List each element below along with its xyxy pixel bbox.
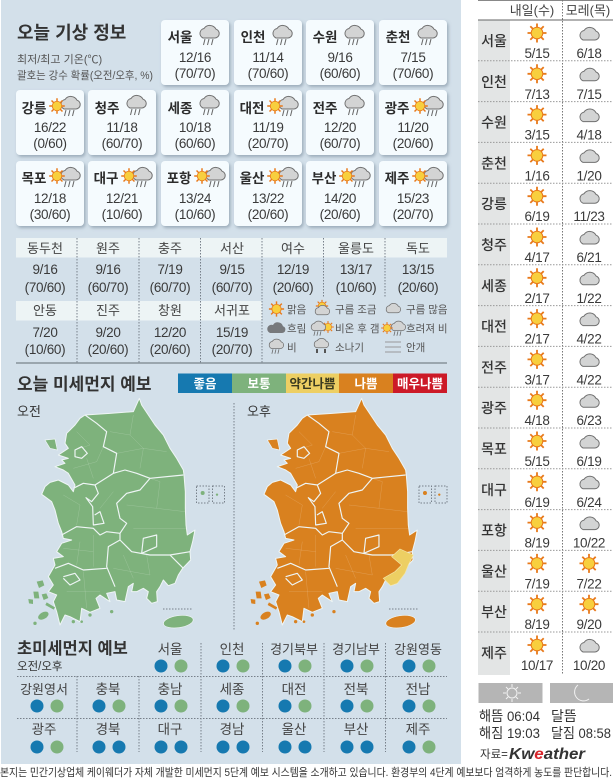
island inset boxes: afternoon [389, 486, 447, 609]
row: 청주: 6/21 [576, 250, 602, 265]
table cell: 서산 [212, 241, 252, 295]
weather card: 대구 [88, 161, 156, 226]
weather card: 청주: 청주 [95, 101, 119, 116]
dust item: 대전: 대전 [282, 682, 306, 697]
weather card: 대구: (10/60) [102, 207, 142, 222]
panel: today's weather and dust forecast [1, 0, 461, 764]
weather card: 부산 [306, 161, 374, 226]
table cell: 진주: 진주 [96, 303, 120, 318]
row: 청주 [481, 228, 602, 265]
table cell: 독도 [398, 241, 438, 295]
map: afternoon dust (orange) [251, 398, 440, 630]
column heading: tomorrow: 내일(수) [510, 3, 554, 18]
row: 포항 [481, 513, 605, 551]
row: 전주 [481, 350, 602, 387]
dust item: 전북 [340, 682, 374, 712]
source credit: Kweather: 자료= [480, 748, 508, 761]
weather card: 춘천 [379, 20, 447, 85]
row: 포항: 10/22 [573, 536, 605, 551]
weather card: 수원: 수원 [313, 30, 337, 45]
label: 오전: 오전 [17, 404, 41, 419]
row: 제주: 제주 [481, 645, 507, 661]
dust item: 세종 [216, 682, 250, 712]
weather card: 인천 [234, 20, 302, 85]
table cell: 울릉도 [336, 241, 376, 295]
weather card: 세종: 10/18 [179, 120, 211, 135]
legend item: 맑음: 맑음 [287, 304, 307, 316]
row: 강릉 [481, 187, 605, 224]
legend item: 소나기 [314, 338, 364, 354]
row: 대전: 4/22 [576, 332, 602, 347]
table cell: 동두천: 동두천 [27, 241, 63, 256]
row: 대구 [481, 472, 602, 510]
row: 강릉: 강릉 [481, 196, 507, 212]
weather card: 포항: 13/24 [179, 191, 212, 206]
row: 전주: 전주 [481, 359, 507, 375]
row: 인천: 인천 [481, 74, 507, 90]
weather card: 광주: (20/60) [393, 136, 433, 151]
row: 대구: 6/24 [576, 495, 602, 510]
island inset boxes: morning [163, 486, 224, 609]
row: 서울: 서울 [481, 33, 507, 49]
legend item: 흐려져 비: 흐려져 비 [406, 323, 448, 335]
row: 부산: 부산 [481, 604, 507, 620]
dust item: 광주 [30, 722, 64, 754]
table cell: 동두천: (70/60) [25, 280, 65, 295]
row: 서울 [481, 24, 602, 61]
row: 목포 [481, 432, 602, 469]
dust item: 대구: 대구 [158, 722, 182, 737]
dust item: 광주: 광주 [32, 722, 56, 737]
row: 포항: 8/19 [524, 536, 550, 551]
text block: sun and moon times: 해짐 19:03 [479, 725, 540, 741]
row: 울산: 7/19 [524, 576, 550, 591]
weather card: 부산: 부산 [312, 171, 337, 186]
dust item: 전남 [402, 682, 436, 712]
source credit: Kweather: Kweather [509, 746, 586, 763]
weather card: 광주 [379, 90, 447, 155]
row: 전주: 4/22 [576, 372, 602, 387]
weather card: 세종: 세종 [168, 101, 192, 116]
weather card: 서울: 12/16 [179, 50, 211, 65]
table cell: 독도: 독도 [406, 241, 430, 256]
table cell: 여수: (20/60) [273, 280, 313, 295]
table cell: 안동: 7/20 [32, 325, 58, 340]
weather card: 제주 [379, 161, 447, 226]
table cell: 창원: (20/60) [150, 342, 190, 357]
icon: sun box [478, 683, 542, 703]
row: 청주: 4/17 [524, 250, 550, 265]
grade: 매우나쁨: 매우나쁨 [397, 376, 443, 391]
row: 수원 [481, 105, 602, 143]
table cell: 창원: 창원 [158, 303, 182, 318]
row: 울산: 7/22 [576, 576, 602, 591]
row: 대전: 대전 [481, 319, 507, 335]
row: 세종: 세종 [481, 278, 507, 294]
table cell: 독도: 13/15 [402, 262, 434, 277]
weather card: 서울: 서울 [168, 30, 192, 45]
row: 세종: 2/17 [524, 291, 550, 306]
grade: 약간나쁨 [286, 374, 339, 393]
table cell: 원주 [88, 241, 128, 295]
weather card: 울산 [234, 161, 302, 226]
dust item: 경기남부: 경기남부 [332, 642, 380, 657]
weather card: 울산: 울산 [240, 171, 265, 186]
row: 부산 [481, 595, 602, 632]
dust item: 강원영동 [394, 642, 442, 672]
weather card: 청주 [88, 90, 156, 155]
dust item: 인천: 인천 [220, 642, 244, 657]
row: 강릉: 6/19 [524, 209, 550, 224]
grade: 매우나쁨 [393, 374, 447, 393]
table cell: 충주: 7/19 [157, 262, 183, 277]
dust item: 경남 [216, 722, 250, 754]
dust item: 경기북부 [270, 642, 318, 672]
weather card: 목포: (30/60) [30, 207, 70, 222]
weather card: 전주: 전주 [313, 101, 337, 116]
dust item: 울산: 울산 [282, 722, 306, 737]
weather card: 전주: 12/20 [324, 120, 356, 135]
weather card: 청주: 11/18 [106, 120, 138, 135]
row: 세종 [481, 268, 602, 306]
row: 부산: 9/20 [576, 617, 602, 632]
dust item: 세종: 세종 [220, 682, 244, 697]
dust item: 경북: 경북 [96, 722, 120, 737]
weather card: 광주: 11/20 [397, 120, 429, 135]
table cell: 창원 [150, 303, 190, 357]
row: 대전 [481, 309, 602, 347]
weather card: 울산: 13/22 [252, 191, 284, 206]
weather card: 서울 [161, 20, 229, 85]
dust item: 강원영서: 강원영서 [20, 682, 68, 697]
text block: unit notes: 괄호는 강수 확률(오전/오후, %) [17, 69, 153, 82]
row: 울산: 울산 [481, 563, 507, 579]
column heading: day after tomorrow: 모레(목) [566, 3, 610, 18]
dust item: 충북 [92, 682, 126, 712]
weather card: 목포 [16, 161, 84, 226]
table cell: 동두천 [25, 241, 65, 295]
dust item: 강원영동: 강원영동 [394, 642, 442, 657]
row: 대구: 대구 [481, 482, 507, 498]
row: 강릉: 11/23 [573, 209, 605, 224]
weather card: 인천: (70/60) [248, 66, 288, 81]
table cell: 서귀포: 서귀포 [214, 303, 250, 318]
weather card: 대전 [234, 90, 302, 155]
table cell: 충주: (60/70) [150, 280, 190, 295]
weather card: 제주: 15/23 [397, 191, 429, 206]
source credit: Kweather [480, 746, 586, 763]
table cell: 서산: (60/70) [212, 280, 252, 295]
row: 대구: 6/19 [524, 495, 550, 510]
weather card: 강릉 [16, 90, 84, 155]
weather card: 수원: 9/16 [327, 50, 353, 65]
text block: unit notes: 최저/최고 기온(℃) [17, 53, 102, 66]
title: today's weather: 오늘 기상 정보 [17, 23, 126, 43]
dust item: 충남: 충남 [158, 682, 182, 697]
table: other cities weather [16, 238, 447, 363]
row: 춘천: 1/20 [576, 168, 602, 183]
region: Ulsan and Busan moderately bad [383, 549, 413, 586]
legend item: 구름 많음 [386, 303, 448, 316]
weather card: 제주: (20/70) [393, 207, 433, 222]
row: 인천: 7/15 [576, 87, 602, 102]
weather card: 목포: 12/18 [34, 191, 66, 206]
table cell: 충주: 충주 [158, 241, 182, 256]
table cell: 여수: 여수 [281, 241, 305, 256]
legend item: 비온 후 갬 [311, 321, 379, 336]
text block: sun and moon times: 해뜸 06:04 [479, 708, 540, 724]
legend item: 비온 후 갬: 비온 후 갬 [335, 323, 379, 335]
weather card: 세종 [161, 90, 229, 155]
map: morning dust (green) [28, 398, 218, 630]
weather card: 수원: (60/60) [320, 66, 360, 81]
row: 수원: 3/15 [524, 128, 550, 143]
table cell: 서귀포: (20/70) [212, 342, 252, 357]
weather card: 울산: (20/60) [248, 207, 288, 222]
legend item: 흐림: 흐림 [287, 323, 306, 335]
text block: sun and moon times [479, 708, 611, 741]
heading: today's fine dust forecast: 오늘 미세먼지 예보 [17, 375, 152, 394]
dust item: 제주: 제주 [406, 722, 430, 737]
weather card: 부산: (20/60) [320, 207, 360, 222]
column labels background [478, 20, 510, 675]
table cell: 원주: (60/70) [88, 280, 128, 295]
legend: dust grades [178, 374, 447, 393]
row: 세종: 1/22 [576, 291, 602, 306]
weather card: 포항: (10/60) [175, 207, 215, 222]
dust item: 경기남부 [332, 642, 380, 672]
divider between morning and afternoon maps [233, 403, 235, 630]
table cell: 여수 [273, 241, 313, 295]
row: 수원: 4/18 [576, 128, 602, 143]
text block: sun and moon times: 달뜸 [551, 708, 577, 724]
weather card: 대전: 대전 [240, 101, 264, 116]
row: 수원: 수원 [481, 115, 507, 131]
table cell: 여수: 12/19 [277, 262, 309, 277]
table cell: 진주: (20/60) [88, 342, 128, 357]
weather card: 대구: 12/21 [106, 191, 138, 206]
table cell: 동두천: 9/16 [32, 262, 58, 277]
row: 제주: 10/17 [521, 658, 553, 673]
row: 인천: 7/13 [524, 87, 550, 102]
weather card: 광주: 광주 [385, 101, 409, 116]
row: 목포: 6/19 [576, 454, 602, 469]
weather card: 인천: 11/14 [252, 50, 284, 65]
row: 춘천: 1/16 [524, 168, 550, 183]
weather card: 세종: (60/60) [175, 136, 215, 151]
dust item: 경남: 경남 [220, 722, 244, 737]
legend item: 비 [269, 339, 297, 354]
dust item: 충북: 충북 [96, 682, 120, 697]
text block: unit notes [17, 53, 153, 82]
dust item: 부산: 부산 [344, 722, 368, 737]
weather card: 제주: 제주 [385, 171, 409, 186]
row: 제주: 10/20 [573, 658, 605, 673]
weather card: 춘천: 춘천 [386, 30, 410, 45]
dust item: 부산 [340, 722, 374, 754]
table cell: 울릉도: 13/17 [340, 262, 372, 277]
text block: sun and moon times: 달짐 08:58 [551, 725, 611, 741]
weather card: 포항: 포항 [167, 171, 192, 186]
table cell: 서귀포: 15/19 [216, 325, 248, 340]
legend item: 흐림 [267, 322, 306, 335]
legend item: 흐려져 비 [381, 321, 448, 336]
row: 광주: 4/18 [524, 413, 550, 428]
row: 춘천: 춘천 [481, 155, 507, 171]
table cell: 독도: (20/60) [398, 280, 438, 295]
table cell: 창원: 12/20 [154, 325, 186, 340]
row: 포항: 포항 [481, 523, 507, 539]
table cell: 울릉도: (10/60) [336, 280, 376, 295]
dust item: 전북: 전북 [344, 682, 368, 697]
legend item: 비: 비 [287, 342, 297, 354]
row: 인천 [481, 64, 602, 102]
weather card: 강릉: 강릉 [22, 101, 46, 116]
legend item: 구름 많음: 구름 많음 [406, 304, 448, 316]
row: 대전: 2/17 [524, 332, 550, 347]
table cell: 원주: 원주 [96, 241, 120, 256]
weather card: 포항 [161, 161, 229, 226]
icon: moon box [550, 683, 613, 703]
table cell: 안동 [25, 303, 65, 357]
weather card: 수원 [306, 20, 374, 85]
table cell: 충주 [150, 241, 190, 295]
dust item: 서울: 서울 [158, 642, 182, 657]
row: 울산 [481, 554, 602, 591]
legend item: 구름 조금: 구름 조금 [335, 304, 377, 316]
row: 부산: 8/19 [524, 617, 550, 632]
table cell: 진주: 9/20 [95, 325, 121, 340]
weather card: 대전: 11/19 [252, 120, 284, 135]
grade: 나쁨: 나쁨 [354, 377, 378, 391]
table cell: 울릉도: 울릉도 [338, 241, 374, 256]
heading: ultrafine dust forecast: 초미세먼지 예보 [17, 639, 128, 658]
grade: 나쁨 [339, 374, 393, 393]
row: 광주: 6/23 [576, 413, 602, 428]
row: 서울: 5/15 [524, 46, 550, 61]
table cell: 진주 [88, 303, 128, 357]
weather card: 강릉: 16/22 [34, 120, 66, 135]
weather card: 서울: (70/70) [175, 66, 215, 81]
legend item: 맑음 [269, 301, 307, 317]
legend: weather icons [267, 300, 448, 354]
table cell: 안동: (10/60) [25, 342, 65, 357]
dotted grid lines [17, 643, 447, 752]
dust item: 경기북부: 경기북부 [270, 642, 318, 657]
dust item: 대전 [278, 682, 312, 712]
weather card: 춘천: (70/60) [393, 66, 433, 81]
row: 광주: 광주 [481, 400, 507, 416]
dust item: 강원영서 [20, 682, 68, 712]
table cell: 서산: 9/15 [219, 262, 245, 277]
dust item: 충남 [154, 682, 188, 712]
row: 광주 [481, 391, 602, 428]
weather card: 춘천: 7/15 [400, 50, 426, 65]
table cell: 원주: 9/16 [95, 262, 121, 277]
weather card: 청주: (60/70) [102, 136, 142, 151]
weather card: 전주: (60/70) [320, 136, 360, 151]
table cell: 안동: 안동 [33, 303, 57, 318]
row: 목포: 목포 [481, 441, 507, 457]
weather card: 전주 [306, 90, 374, 155]
row: 목포: 5/15 [524, 454, 550, 469]
dust item: 대구 [154, 722, 188, 754]
grade: 보통: 보통 [247, 377, 271, 391]
grade: 좋음: 좋음 [193, 377, 217, 391]
legend item: 소나기: 소나기 [335, 342, 364, 354]
dust item: 서울 [154, 642, 188, 672]
grade: 보통 [232, 374, 286, 393]
label: 오후: 오후 [247, 404, 271, 419]
weather card: 부산: 14/20 [324, 191, 356, 206]
grade: 좋음 [178, 374, 232, 393]
legend item: 안개: 안개 [406, 342, 425, 354]
legend item: 구름 조금 [315, 300, 377, 316]
grade: 약간나쁨: 약간나쁨 [289, 377, 336, 391]
dust item: 제주 [402, 722, 436, 754]
weather card: 인천: 인천 [241, 30, 265, 45]
row: 전주: 3/17 [524, 372, 550, 387]
dust item: 울산 [278, 722, 312, 754]
dust item: 경북 [92, 722, 126, 754]
row: 제주 [481, 636, 605, 673]
table cell: 서귀포 [212, 303, 252, 357]
row: 청주: 청주 [481, 237, 507, 253]
panel: two-day forecast [478, 0, 613, 675]
weather card: 대전: (20/70) [248, 136, 288, 151]
table cell: 서산: 서산 [220, 241, 244, 256]
note: morning / afternoon: 오전/오후 [17, 660, 63, 673]
dust item: 전남: 전남 [406, 682, 430, 697]
weather card: 목포: 목포 [22, 171, 46, 186]
legend item: 안개 [385, 342, 425, 354]
row: 춘천 [481, 146, 602, 183]
weather card: 대구: 대구 [94, 171, 118, 186]
row: 서울: 6/18 [576, 46, 602, 61]
dust item: 인천 [216, 642, 250, 672]
weather card: 강릉: (0/60) [33, 136, 67, 151]
